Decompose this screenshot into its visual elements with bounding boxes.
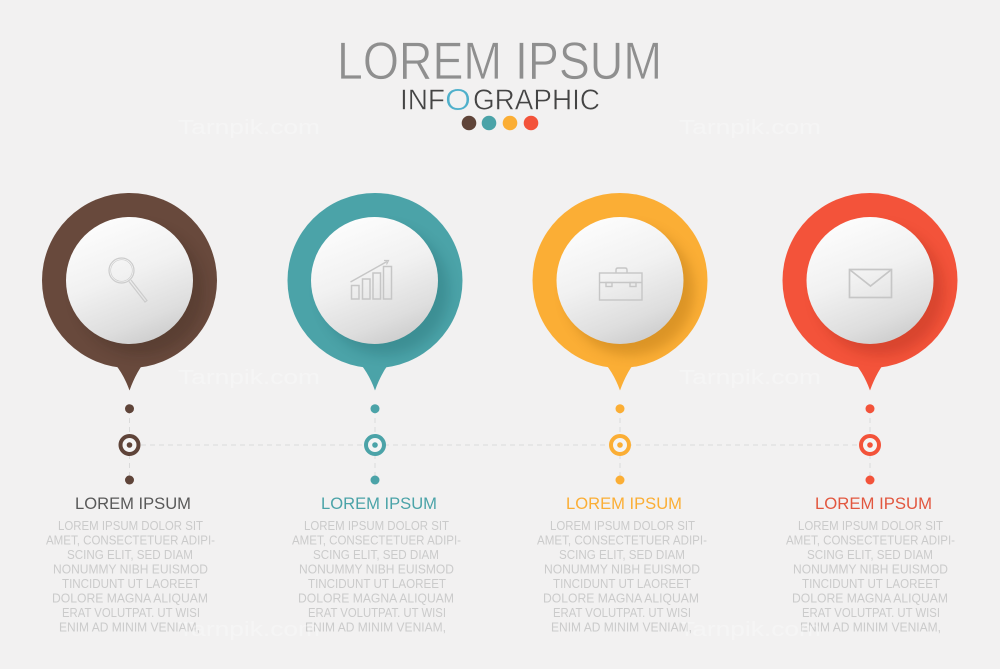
text block: step 4 body: AMET, CONSECTETUER ADIPI- [786, 534, 955, 548]
text block: step 1 body: LOREM IPSUM DOLOR SIT [58, 519, 203, 533]
icon: briefcase [600, 268, 642, 300]
text block: step 1 body: DOLORE MAGNA ALIQUAM [52, 592, 208, 606]
heading: LOREM IPSUM: LOREM IPSUM [337, 32, 662, 91]
text block: step 1 body: ENIM AD MINIM VENIAM, [59, 620, 200, 634]
text block: step 2 body [292, 519, 461, 634]
text block: step 2 body: AMET, CONSECTETUER ADIPI- [292, 534, 461, 548]
text block: step 3 body: LOREM IPSUM DOLOR SIT [550, 519, 695, 533]
subheading: INFOGRAPHIC: INF [400, 84, 445, 116]
watermarks: Tarnpik.com [679, 619, 821, 641]
title block [337, 32, 662, 130]
connector: horizontal dashed timeline [141, 444, 860, 446]
text block: step 2 body: ENIM AD MINIM VENIAM, [305, 620, 446, 634]
title colour dots [462, 116, 538, 130]
pin marker yellow [532, 193, 708, 390]
text block: step 3 body: NONUMMY NIBH EUISMOD [544, 562, 700, 576]
text block: step 4 body: DOLORE MAGNA ALIQUAM [792, 592, 948, 606]
watermarks: Tarnpik.com [679, 117, 821, 139]
text block: step 4 body: ENIM AD MINIM VENIAM, [800, 620, 941, 634]
text block: step 1 body: TINCIDUNT UT LAOREET [62, 577, 200, 591]
subheading: INFOGRAPHIC: O [445, 82, 471, 117]
panel: step 2 teal [288, 193, 462, 634]
text block: step 4 body: NONUMMY NIBH EUISMOD [793, 562, 948, 576]
text block: step 2 body: DOLORE MAGNA ALIQUAM [298, 592, 454, 606]
icon: magnifying glass [109, 258, 147, 302]
text block: step 1 body [46, 519, 215, 634]
label: step 4 heading: LOREM IPSUM [815, 495, 932, 513]
subheading: INFOGRAPHIC: GRAPHIC [473, 84, 600, 116]
text block: step 2 body: ERAT VOLUTPAT. UT WISI [308, 606, 446, 620]
text block: step 3 body [537, 519, 707, 634]
label: step 2 heading: LOREM IPSUM [321, 495, 437, 513]
text block: step 2 body: TINCIDUNT UT LAOREET [308, 577, 446, 591]
text block: step 3 body: TINCIDUNT UT LAOREET [553, 577, 691, 591]
text block: step 3 body: AMET, CONSECTETUER ADIPI- [537, 534, 707, 548]
watermarks: Tarnpik.com [178, 117, 320, 139]
timeline marker brown [120, 404, 138, 484]
icon: envelope [850, 270, 892, 298]
text block: step 1 body: AMET, CONSECTETUER ADIPI- [46, 534, 215, 548]
watermarks: Tarnpik.com [679, 367, 821, 389]
text block: step 4 body: LOREM IPSUM DOLOR SIT [798, 519, 943, 533]
label: step 3 heading: LOREM IPSUM [566, 495, 682, 513]
panel: step 4 orange-red [782, 193, 958, 634]
text block: step 3 body: ERAT VOLUTPAT. UT WISI [553, 606, 691, 620]
pin marker teal [288, 193, 462, 390]
text block: step 2 body: SCING ELIT, SED DIAM [313, 548, 439, 562]
text block: step 2 body: NONUMMY NIBH EUISMOD [299, 562, 454, 576]
text block: step 4 body: SCING ELIT, SED DIAM [807, 548, 933, 562]
timeline marker orange-red [861, 404, 879, 484]
text block: step 3 body: ENIM AD MINIM VENIAM, [551, 620, 692, 634]
panel: step 1 brown [42, 193, 217, 634]
label: step 1 heading: LOREM IPSUM [75, 495, 191, 513]
watermarks: Tarnpik.com [178, 367, 320, 389]
text block: step 3 body: DOLORE MAGNA ALIQUAM [543, 592, 699, 606]
text block: step 2 body: LOREM IPSUM DOLOR SIT [304, 519, 449, 533]
text block: step 4 body: TINCIDUNT UT LAOREET [802, 577, 940, 591]
icon: bar chart with arrow [350, 260, 392, 299]
subheading: INFOGRAPHIC [400, 82, 600, 117]
text block: step 3 body: SCING ELIT, SED DIAM [559, 548, 685, 562]
text block: step 4 body [786, 519, 955, 634]
text block: step 1 body: SCING ELIT, SED DIAM [67, 548, 193, 562]
text block: step 4 body: ERAT VOLUTPAT. UT WISI [802, 606, 940, 620]
watermarks [178, 117, 821, 641]
pin marker orange-red [782, 193, 958, 390]
text block: step 1 body: NONUMMY NIBH EUISMOD [53, 562, 208, 576]
pin marker brown [42, 193, 217, 390]
watermarks: Tarnpik.com [178, 619, 320, 641]
panel: step 3 yellow [532, 193, 708, 634]
text block: step 1 body: ERAT VOLUTPAT. UT WISI [62, 606, 200, 620]
timeline marker yellow [611, 404, 629, 484]
timeline marker teal [366, 404, 384, 484]
